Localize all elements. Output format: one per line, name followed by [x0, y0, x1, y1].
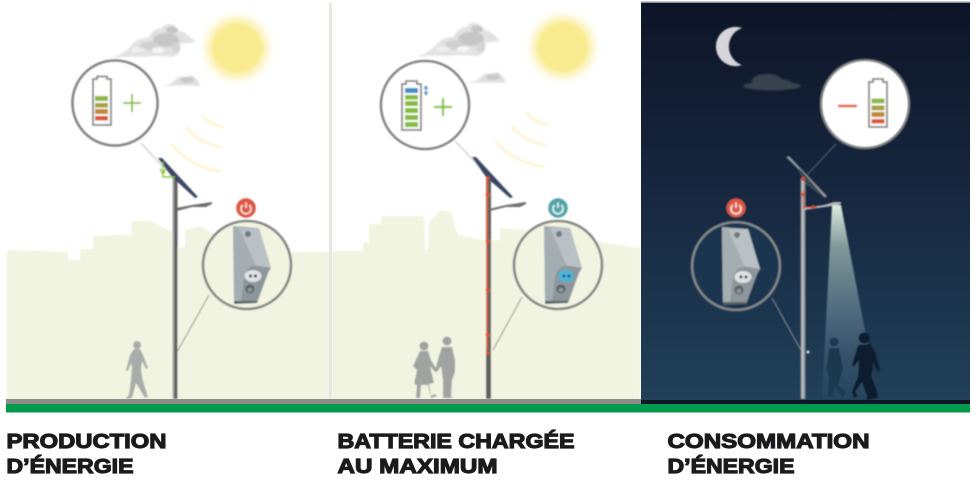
device callout — [692, 222, 780, 310]
leader line to device — [493, 297, 522, 350]
ground strip light panels — [6, 399, 641, 404]
leader line to device — [772, 298, 802, 352]
caption: consommation d'énergie — [668, 430, 870, 478]
street lamp — [158, 158, 212, 399]
panel divider — [329, 3, 332, 400]
battery callout — [821, 60, 909, 148]
green baseline bar — [6, 404, 970, 412]
minus sign — [838, 105, 857, 107]
panel: batterie chargée — [332, 16, 640, 400]
small cloud — [162, 75, 200, 86]
battery icon — [402, 81, 421, 130]
battery callout — [72, 60, 158, 146]
street lamp with discharge flow — [786, 156, 841, 399]
caption: production d'énergie: D’ÉNERGIE — [6, 455, 134, 478]
leader line to battery — [806, 144, 836, 176]
sun rays — [496, 113, 548, 167]
plus sign — [434, 98, 452, 116]
caption: production d'énergie — [6, 430, 166, 478]
couple silhouette — [413, 336, 455, 398]
panel: production d'énergie — [7, 17, 330, 400]
sun rays — [172, 115, 223, 171]
up and down arrows — [424, 85, 428, 96]
power button — [548, 198, 568, 218]
street lamp with charge flow — [472, 157, 526, 399]
battery callout — [381, 61, 469, 149]
night sky — [641, 3, 970, 401]
crescent moon — [716, 27, 742, 66]
leader line to battery — [141, 143, 163, 167]
caption: production d'énergie: PRODUCTION — [6, 430, 166, 453]
big cloud — [110, 24, 195, 58]
sun — [206, 17, 268, 79]
big cloud — [415, 23, 500, 57]
foreground pedestrian silhouette — [852, 332, 880, 400]
battery icon — [93, 76, 111, 125]
background pedestrian silhouette — [826, 338, 846, 398]
device callout — [203, 221, 291, 309]
ground strip night panel — [641, 400, 970, 404]
caption: consommation d'énergie: CONSOMMATION — [668, 430, 870, 453]
caption: batterie chargée au maximum: BATTERIE CHARGÉE — [338, 430, 574, 453]
caption: batterie chargée au maximum: AU MAXIMUM — [338, 455, 498, 478]
plus sign — [123, 94, 141, 112]
panel: consommation d'énergie — [641, 2, 970, 401]
night cloud — [743, 74, 801, 90]
caption: consommation d'énergie: D’ÉNERGIE — [668, 455, 794, 478]
caption: batterie chargée au maximum — [338, 430, 574, 478]
leader line to battery — [455, 141, 478, 165]
skyline background — [332, 210, 640, 400]
power button — [236, 198, 256, 218]
leader line to device — [177, 295, 209, 352]
light cone — [822, 205, 878, 399]
sun — [532, 16, 594, 78]
skyline background — [7, 221, 330, 400]
small cloud — [468, 72, 506, 83]
device callout — [514, 221, 602, 309]
battery icon — [869, 79, 887, 127]
walker silhouette — [125, 341, 148, 399]
power button — [726, 198, 746, 218]
